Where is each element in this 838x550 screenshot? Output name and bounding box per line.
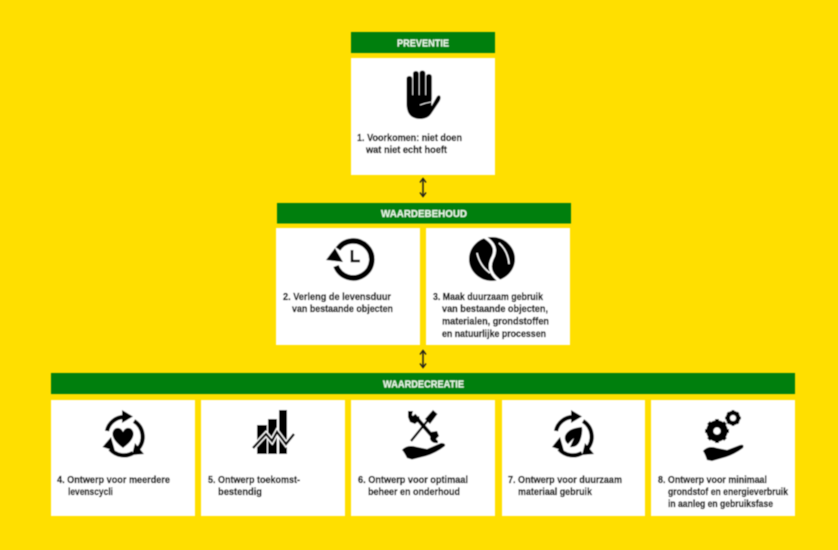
icon: two leaves in a cycle [469,236,515,282]
text: voorkomen: wat niet echt hoeft [365,145,448,156]
card 1: voorkomen [351,58,495,175]
card 7: duurzaam materiaal [502,400,645,516]
card 3: duurzaam gebruik [426,228,570,345]
icon: tools above hand [402,410,445,460]
text: duurzaam gebruik: materialen, grondstoffen [442,316,549,328]
card 6: beheer en onderhoud [351,400,495,516]
text: minimaal verbruik: 8. Ontwerp voor minimaal [658,475,767,486]
heading: waardebehoud [277,203,571,224]
text: levensduur [283,292,393,315]
text: duurzaam gebruik: van bestaande objecten, [442,304,548,315]
text: voorkomen: 1. Voorkomen: niet doen [357,133,462,144]
heading: waardecreatie [51,373,795,394]
heading: preventie [351,32,495,53]
text: toekomstbestendig [208,475,300,498]
text: levensduur: 2. Verleng de levensduur [283,292,391,303]
text: minimaal verbruik: grondstof en energieverbruik [668,487,788,498]
text: beheer en onderhoud: 6. Ontwerp voor optimaal [358,475,468,486]
icon: clock with arrow [326,241,372,278]
icon: raised hand [406,70,441,119]
text: duurzaam gebruik [433,292,549,340]
text: duurzaam materiaal [508,475,622,498]
icon: cycle with leaf [552,410,594,455]
arrow: preventie to waardebehoud [420,178,426,196]
panel: preventie [351,32,495,175]
panel: waardecreatie [51,373,795,516]
heading: waardebehoud: WAARDEBEHOUD [381,208,467,220]
card 5: toekomstbestendig [201,400,345,516]
heading: waardecreatie: WAARDECREATIE [383,378,464,390]
text: levensduur: van bestaande objecten [292,304,393,315]
text: duurzaam gebruik: en natuurlijke processen [442,329,546,340]
card 8: minimaal verbruik [651,400,795,516]
panel: waardebehoud [276,203,571,345]
text: duurzaam materiaal: materiaal gebruik [518,487,592,498]
text: minimaal verbruik: in aanleg en gebruiksfase [668,499,773,510]
text: toekomstbestendig: 5. Ontwerp toekomst- [208,475,300,486]
icon: bars with trend line [253,410,294,454]
icon: gears above hand [703,410,744,461]
icon: cycle with heart [102,410,144,455]
text: beheer en onderhoud [358,475,468,498]
text: levenscycli [57,475,170,498]
text: toekomstbestendig: bestendig [218,487,262,498]
text: levenscycli: 4. Ontwerp voor meerdere [57,475,170,486]
text: voorkomen [357,133,462,156]
text: levenscycli: levenscycli [68,487,113,498]
heading: preventie: PREVENTIE [397,38,449,50]
arrow: waardebehoud to waardecreatie [420,350,426,368]
text: minimaal verbruik [658,475,788,510]
text: beheer en onderhoud: beheer en onderhoud [368,487,460,498]
card 2: levensduur [276,228,420,345]
card 4: levenscycli [51,400,195,516]
text: duurzaam gebruik: 3. Maak duurzaam gebruik [433,292,543,303]
text: duurzaam materiaal: 7. Ontwerp voor duurzaam [508,475,622,486]
